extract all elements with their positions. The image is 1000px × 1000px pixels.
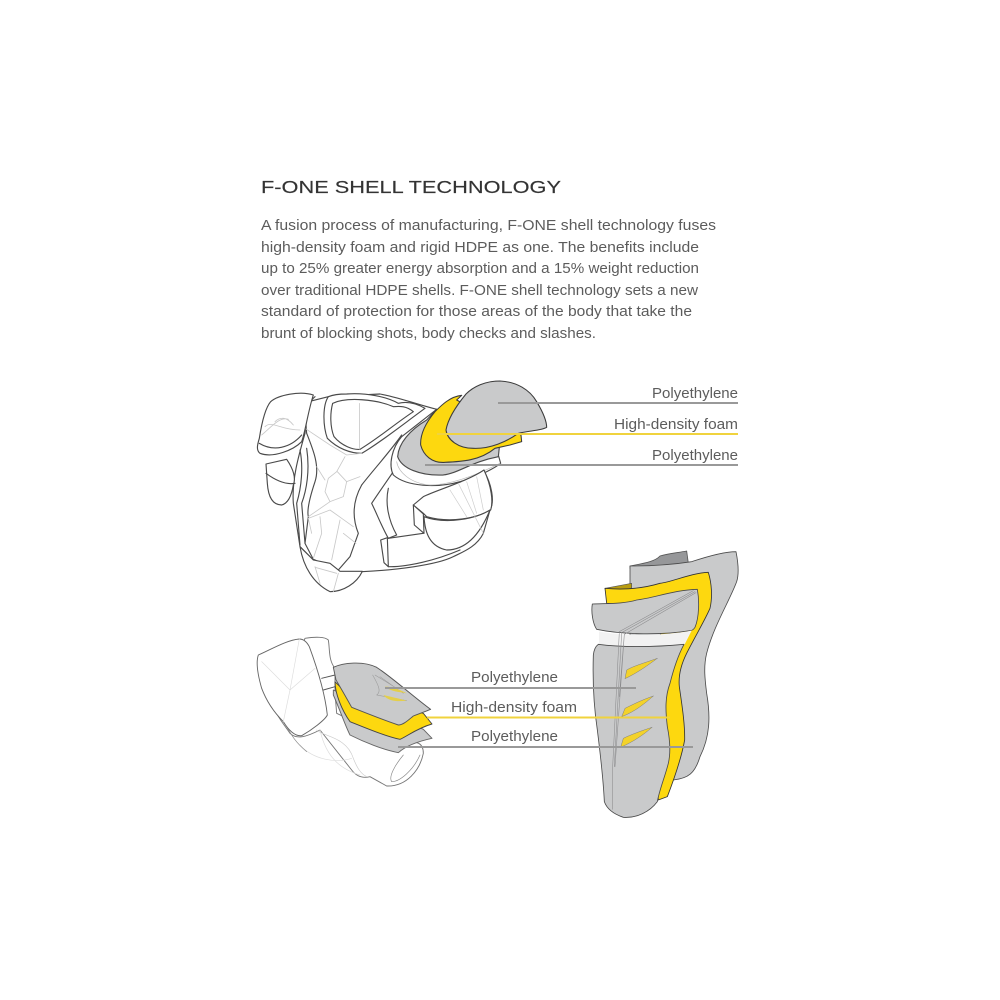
text block: description: high-density foam and rigid HDPE as one. The benefits include	[261, 240, 699, 256]
right arm cuff	[413, 470, 492, 520]
text block: description: up to 25% greater energy absorption and a 15% weight reduction	[261, 261, 699, 277]
left arm strap	[266, 459, 294, 505]
labels: lower: Polyethylene	[471, 670, 558, 686]
text block: description: A fusion process of manufacturing, F-ONE shell technology fuses	[261, 218, 716, 234]
right shoulder outer	[391, 409, 501, 486]
bottom flap	[300, 547, 362, 592]
rear shell	[630, 552, 738, 780]
labels: shoulder	[614, 386, 738, 464]
layer: lower polyethylene	[333, 690, 432, 753]
illustration: shin guard	[592, 551, 738, 817]
layer: lower polyethylene	[398, 409, 499, 475]
labels: lower: High-density foam	[451, 700, 577, 716]
front upper cuff	[592, 589, 699, 634]
chest opening	[324, 394, 425, 453]
text block: description: standard of protection for those areas of the body that take the	[261, 304, 692, 320]
right side panel	[372, 467, 397, 538]
right sleeve and body edge	[293, 394, 492, 572]
back dark tab	[630, 551, 688, 568]
forearm guard	[257, 639, 327, 736]
labels: shoulder: Polyethylene	[652, 448, 738, 464]
layer: foam	[335, 682, 432, 739]
text block: description	[261, 218, 716, 342]
illustration: shoulder layers	[421, 381, 547, 462]
labels: lower: Polyethylene	[471, 729, 558, 745]
leader lines: shoulder	[425, 403, 738, 465]
left shoulder cap	[257, 393, 313, 455]
text block: description: brunt of blocking shots, body checks and slashes.	[261, 326, 596, 342]
foam slits	[373, 675, 407, 701]
layer: upper polyethylene	[446, 381, 547, 448]
dark foam tab	[605, 583, 632, 593]
arm body	[275, 637, 423, 786]
white gap	[599, 631, 692, 647]
side strap	[381, 538, 388, 567]
layer: foam	[421, 395, 522, 462]
leader lines: lower	[385, 688, 693, 747]
layer: upper polyethylene	[333, 663, 431, 725]
fold lines	[613, 591, 696, 809]
labels: shoulder: Polyethylene	[652, 386, 738, 402]
title: F-ONE SHELL TECHNOLOGY	[261, 177, 561, 197]
foam layer	[605, 572, 712, 800]
text block: description: over traditional HDPE shells. F-ONE shell technology sets a new	[261, 283, 699, 299]
illustration: elbow pad	[257, 637, 432, 786]
illustration: shoulder pad	[257, 393, 501, 592]
front lower shell	[593, 644, 684, 817]
central spine panel	[305, 397, 402, 570]
labels: shoulder: High-density foam	[614, 417, 738, 433]
vent slits	[621, 658, 657, 747]
labels: lower	[451, 670, 577, 745]
